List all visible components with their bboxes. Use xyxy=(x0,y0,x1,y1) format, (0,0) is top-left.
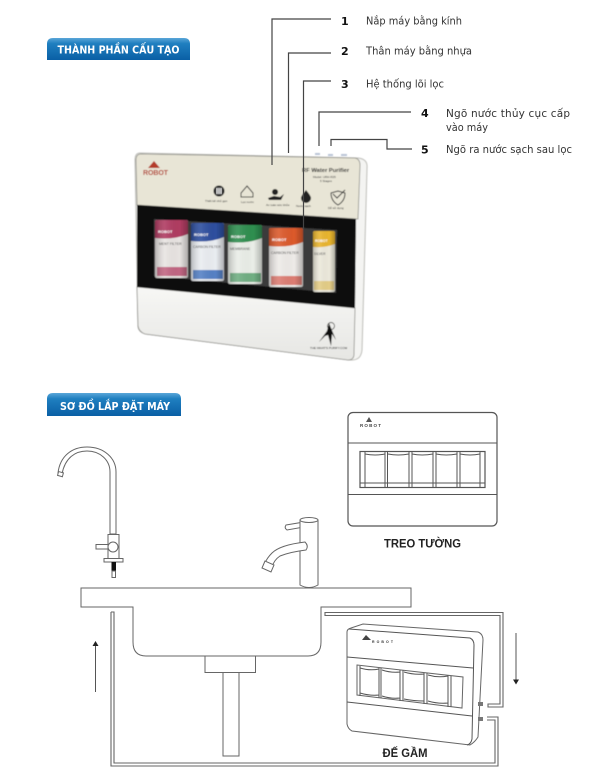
label 1 xyxy=(341,14,462,28)
under-sink unit xyxy=(347,624,483,745)
cartridge 2: ROBOT xyxy=(194,232,209,237)
heading: sơ đồ lắp đặt máy: SƠ ĐỒ LẮP ĐẶT MÁY xyxy=(60,398,170,413)
cartridge 1: ROBOT xyxy=(158,229,173,234)
cartridge 1 xyxy=(155,220,188,278)
heading: sơ đồ lắp đặt máy xyxy=(47,393,181,416)
black glass band xyxy=(137,205,356,308)
purifier body xyxy=(135,153,367,360)
cartridge 1: MENT FILTER xyxy=(159,242,182,246)
wall-mount unit: ROBOT xyxy=(360,423,381,428)
inlet water pipe xyxy=(111,612,498,766)
leader line 2 xyxy=(288,53,331,153)
logo: robot xyxy=(143,161,169,177)
label 3 xyxy=(341,78,444,91)
feature icons xyxy=(205,186,345,210)
filter window xyxy=(154,219,337,293)
under-sink caption: ĐẾ GẦM xyxy=(382,747,428,760)
product name xyxy=(302,168,350,183)
label 1: Nắp máy bằng kính xyxy=(366,14,462,28)
logo: robot: ROBOT xyxy=(143,170,169,177)
sink tap xyxy=(262,518,318,588)
arrow down xyxy=(513,633,519,684)
logo: athlete: THE WHAT'S PURIFY.COM xyxy=(310,346,348,350)
feature icons: Lọc nước xyxy=(241,200,254,204)
logo: athlete xyxy=(310,322,348,350)
cartridge 5: SILVER xyxy=(314,252,326,256)
heading: thành phần cấu tạo: THÀNH PHẦN CẤU TẠO xyxy=(58,42,180,56)
product name: RF Water Purifier xyxy=(302,168,350,174)
sink and countertop xyxy=(81,588,411,656)
cartridge 5 xyxy=(313,231,335,292)
label 4: vào máy xyxy=(446,122,488,134)
label 1: 1 xyxy=(341,15,349,28)
cartridge 4: ROBOT xyxy=(272,237,287,242)
outlet water pipe xyxy=(325,612,503,707)
label 4: 4 xyxy=(421,107,429,120)
leader line 1 xyxy=(272,19,331,165)
heading: thành phần cấu tạo xyxy=(47,38,190,60)
feature icons: Nước sạch xyxy=(296,204,311,208)
cartridge 3: MEMBRANE xyxy=(230,247,251,251)
product name: Model: URH-R25 xyxy=(313,175,336,179)
product photo: water purifier xyxy=(135,153,367,360)
feature icons: Dễ sử dụng xyxy=(328,205,344,210)
filtered-water faucet xyxy=(58,447,123,578)
arrow up xyxy=(92,641,98,692)
connectors xyxy=(315,153,347,156)
label 3: Hệ thống lõi lọc xyxy=(366,78,444,90)
label 4: Ngõ nước thủy cục cấp xyxy=(446,108,570,120)
label 5: Ngõ ra nước sạch sau lọc xyxy=(446,144,572,156)
cartridge 2 xyxy=(191,223,224,281)
sink drain xyxy=(205,656,256,756)
under-sink unit: ROBOT xyxy=(372,640,394,644)
feature icons: An toàn sức khỏe xyxy=(266,203,290,207)
label 2: 2 xyxy=(341,45,349,58)
leader line 5 xyxy=(331,140,412,149)
wall-mount caption: TREO TƯỜNG xyxy=(384,538,461,550)
cartridge 5: ROBOT xyxy=(315,239,328,243)
cartridge 3 xyxy=(228,225,262,284)
feature icons: Thiết kế nhỏ gọn xyxy=(205,199,228,203)
product name: 5 Stages xyxy=(320,179,332,183)
label 2: Thân máy bằng nhựa xyxy=(365,44,472,58)
cartridge 2: CARBON FILTER xyxy=(193,245,221,249)
cartridge 3: ROBOT xyxy=(231,234,246,239)
cartridge 4: CARBON FILTER xyxy=(271,251,299,255)
leader line 3 xyxy=(304,81,331,229)
label 4 xyxy=(421,107,570,134)
label 5: 5 xyxy=(421,144,429,156)
leader line 4 xyxy=(319,112,411,146)
cartridge 4 xyxy=(269,228,303,287)
wall-mount diagram xyxy=(348,412,497,550)
label 3: 3 xyxy=(341,78,349,91)
wall-mount unit xyxy=(348,412,497,526)
label 2 xyxy=(341,44,472,58)
